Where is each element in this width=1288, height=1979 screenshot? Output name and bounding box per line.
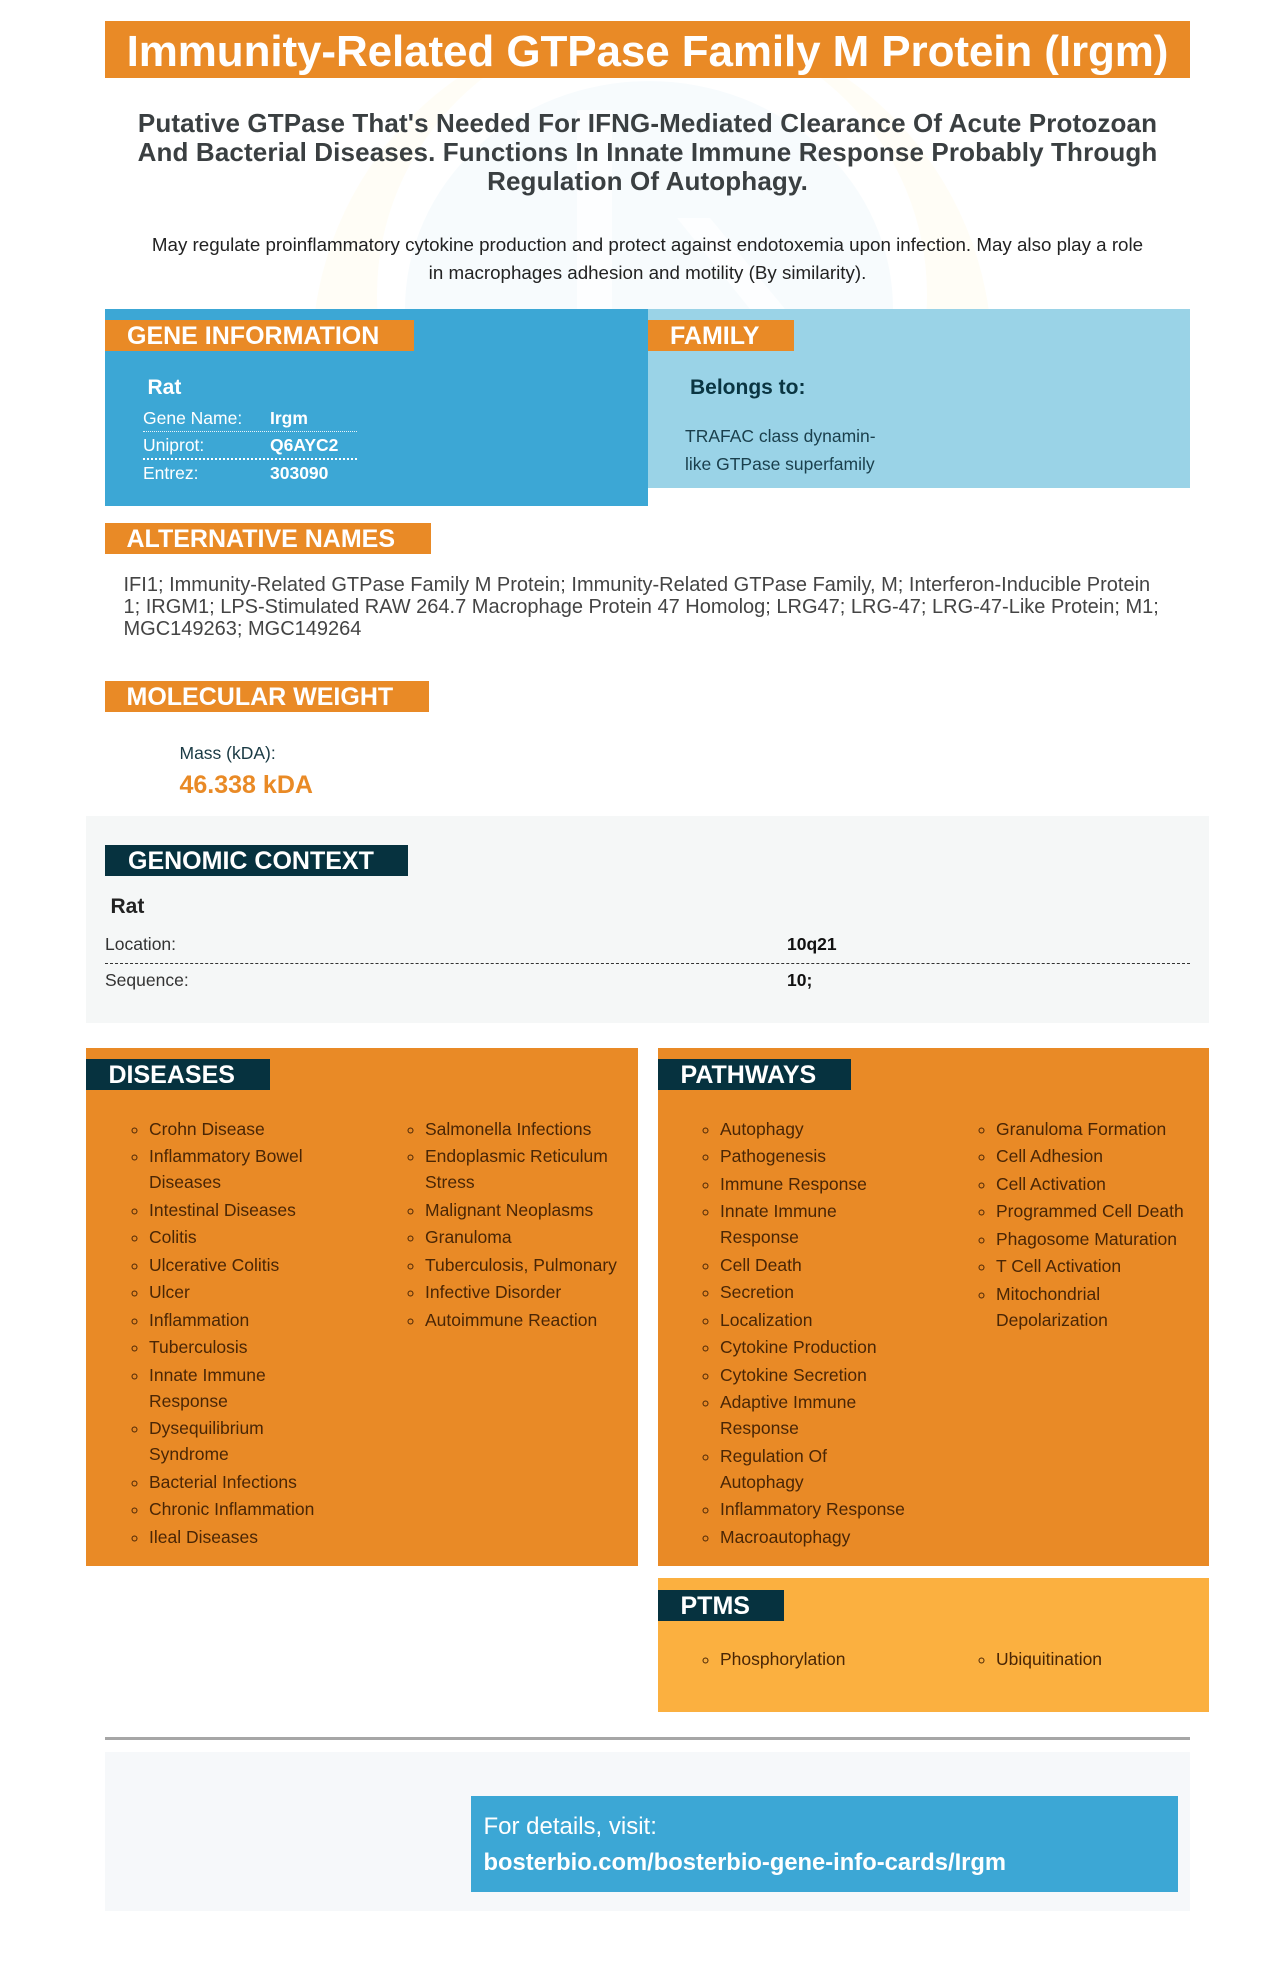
pathways list column 1: Secretion [720,1282,794,1302]
pathways list column 1: Autophagy [720,1119,804,1139]
pathways list column 1: Immune Response [720,1174,867,1194]
description: May regulate proinflammatory cytokine production and protect against endotoxemia upon infection. May also play a role [152,234,1143,255]
diseases list column 2: Autoimmune Reaction [425,1310,597,1330]
pathways list column 2: Phagosome Maturation [996,1229,1177,1249]
watermark logo [316,78,988,309]
diseases list column 1 [132,1119,314,1547]
alternative names text: IFI1; Immunity-Related GTPase Family M Protein; Immunity-Related GTPase Family, M; Interferon-Inducible Protein [124,574,1150,596]
panel: family [648,309,1190,488]
gene name row [143,404,357,432]
diseases list column 1: Ulcerative Colitis [149,1255,279,1275]
diseases list column 1: Ulcer [149,1282,190,1302]
location row [105,930,1190,964]
heading: ptms [658,1590,784,1621]
pathways list column 2: Mitochondrial [996,1284,1100,1304]
pathways list column 1: Cytokine Production [720,1337,877,1357]
diseases list column 2: Infective Disorder [425,1282,561,1302]
heading: pathways [658,1059,851,1090]
pathways list column 2: Granuloma Formation [996,1119,1166,1139]
diseases list column 1: Ileal Diseases [149,1527,258,1547]
pathways list column 1: Autophagy [720,1472,804,1492]
pathways list column 1: Inflammatory Response [720,1499,905,1519]
diseases list column 2: Salmonella Infections [425,1119,591,1139]
diseases list column 1: Response [149,1391,228,1411]
gene info table [143,408,357,483]
heading: molecular weight: MOLECULAR WEIGHT [126,683,393,711]
details label: For details, visit: [484,1813,657,1840]
pathways list column 1: Cell Death [720,1255,802,1275]
panel: gene information [105,309,648,506]
entrez row: 303090 [270,463,328,483]
mass value: 46.338 kDA [180,771,313,799]
panel: genomic context [86,816,1209,1023]
pathways list column 1: Cytokine Secretion [720,1365,867,1385]
diseases list column 1: Syndrome [149,1444,229,1464]
species label: Rat [148,376,181,399]
pathways list column 1: Regulation Of [720,1446,827,1466]
family text: like GTPase superfamily [685,454,875,474]
description: in macrophages adhesion and motility (By similarity). [429,262,866,283]
diseases list column 1: Inflammation [149,1310,249,1330]
heading: pathways: PATHWAYS [680,1061,816,1089]
details url: bosterbio.com/bosterbio-gene-info-cards/Irgm [484,1849,1006,1876]
belongs to label: Belongs to: [690,376,806,399]
heading: family: FAMILY [670,322,759,350]
heading: gene information: GENE INFORMATION [127,322,379,350]
pathways list column 2: Cell Activation [996,1174,1106,1194]
subtitle: Putative GTPase That's Needed For IFNG-Mediated Clearance Of Acute Protozoan [138,108,1157,138]
heading: ptms: PTMS [680,1592,750,1620]
panel: pathways [658,1048,1209,1566]
pathways list column 1: Localization [720,1310,812,1330]
uniprot row: Q6AYC2 [270,435,338,455]
diseases list column 1: Chronic Inflammation [149,1499,314,1519]
pathways list column 2: Cell Adhesion [996,1146,1103,1166]
diseases list column 2: Endoplasmic Reticulum [425,1146,608,1166]
pathways list column 1 [702,1119,905,1547]
diseases list column 1: Intestinal Diseases [149,1200,296,1220]
diseases list column 1: Crohn Disease [149,1119,265,1139]
heading: diseases: DISEASES [108,1061,235,1089]
mass label: Mass (kDA): [180,743,276,763]
pathways list column 1: Adaptive Immune [720,1392,856,1412]
family text [685,426,876,474]
alternative names text: 1; IRGM1; LPS-Stimulated RAW 264.7 Macrophage Protein 47 Homolog; LRG47; LRG-47; LRG-47-Like Protein; M1; [124,596,1159,618]
location row: Location: [105,934,176,954]
gene name row: Irgm [270,408,308,428]
pathways list column 2: Programmed Cell Death [996,1201,1184,1221]
diseases list column 1: Innate Immune [149,1365,266,1385]
family text: TRAFAC class dynamin- [685,426,876,446]
diseases list column 1: Colitis [149,1227,197,1247]
diseases list column 2: Tuberculosis, Pulmonary [425,1255,617,1275]
gene name row: Gene Name: [143,408,242,428]
alternative names text [124,574,1159,640]
pathways list column 2: T Cell Activation [996,1256,1121,1276]
subtitle: Regulation Of Autophagy. [487,166,808,196]
diseases list column 2 [408,1119,617,1330]
pathways list column 1: Innate Immune [720,1201,837,1221]
sequence row: Sequence: [105,970,189,990]
pathways list column 1: Pathogenesis [720,1146,826,1166]
uniprot row: Uniprot: [143,435,204,455]
heading: diseases [86,1059,270,1090]
pathways list column 1: Macroautophagy [720,1527,850,1547]
pathways list column 1: Response [720,1227,799,1247]
panel: footer [105,1752,1190,1911]
subtitle: And Bacterial Diseases. Functions In Innate Immune Response Probably Through [138,137,1157,167]
diseases list column 2: Stress [425,1172,475,1192]
description [152,234,1143,283]
ptms list column 1: Phosphorylation [720,1649,846,1669]
entrez row: Entrez: [143,463,198,483]
entrez row [143,463,328,483]
diseases list column 1: Diseases [149,1172,221,1192]
diseases list column 1: Inflammatory Bowel [149,1146,303,1166]
title banner: Immunity-Related GTPase Family M Protein (Irgm) [127,27,1168,76]
sequence row: 10; [787,970,812,990]
ptms list column 2: Ubiquitination [996,1649,1102,1669]
species label: Rat [110,895,144,918]
heading: family [648,320,794,351]
sequence row [105,970,812,990]
diseases list column 2: Malignant Neoplasms [425,1200,593,1220]
pathways list column 2: Depolarization [996,1310,1108,1330]
heading: alternative names: ALTERNATIVE NAMES [126,525,395,553]
pathways list column 1: Response [720,1418,799,1438]
panel: ptms [658,1578,1209,1712]
location row: 10q21 [787,934,837,954]
diseases list column 1: Bacterial Infections [149,1472,297,1492]
heading: genomic context: GENOMIC CONTEXT [128,847,374,875]
diseases list column 1: Tuberculosis [149,1337,248,1357]
diseases list column 2: Granuloma [425,1227,512,1247]
diseases list column 1: Dysequilibrium [149,1418,264,1438]
uniprot row [143,432,357,460]
subtitle [138,108,1157,196]
pathways list column 2 [978,1119,1184,1330]
panel: diseases [86,1048,638,1566]
alternative names text: MGC149263; MGC149264 [124,618,361,640]
callout: details link [471,1796,1178,1892]
